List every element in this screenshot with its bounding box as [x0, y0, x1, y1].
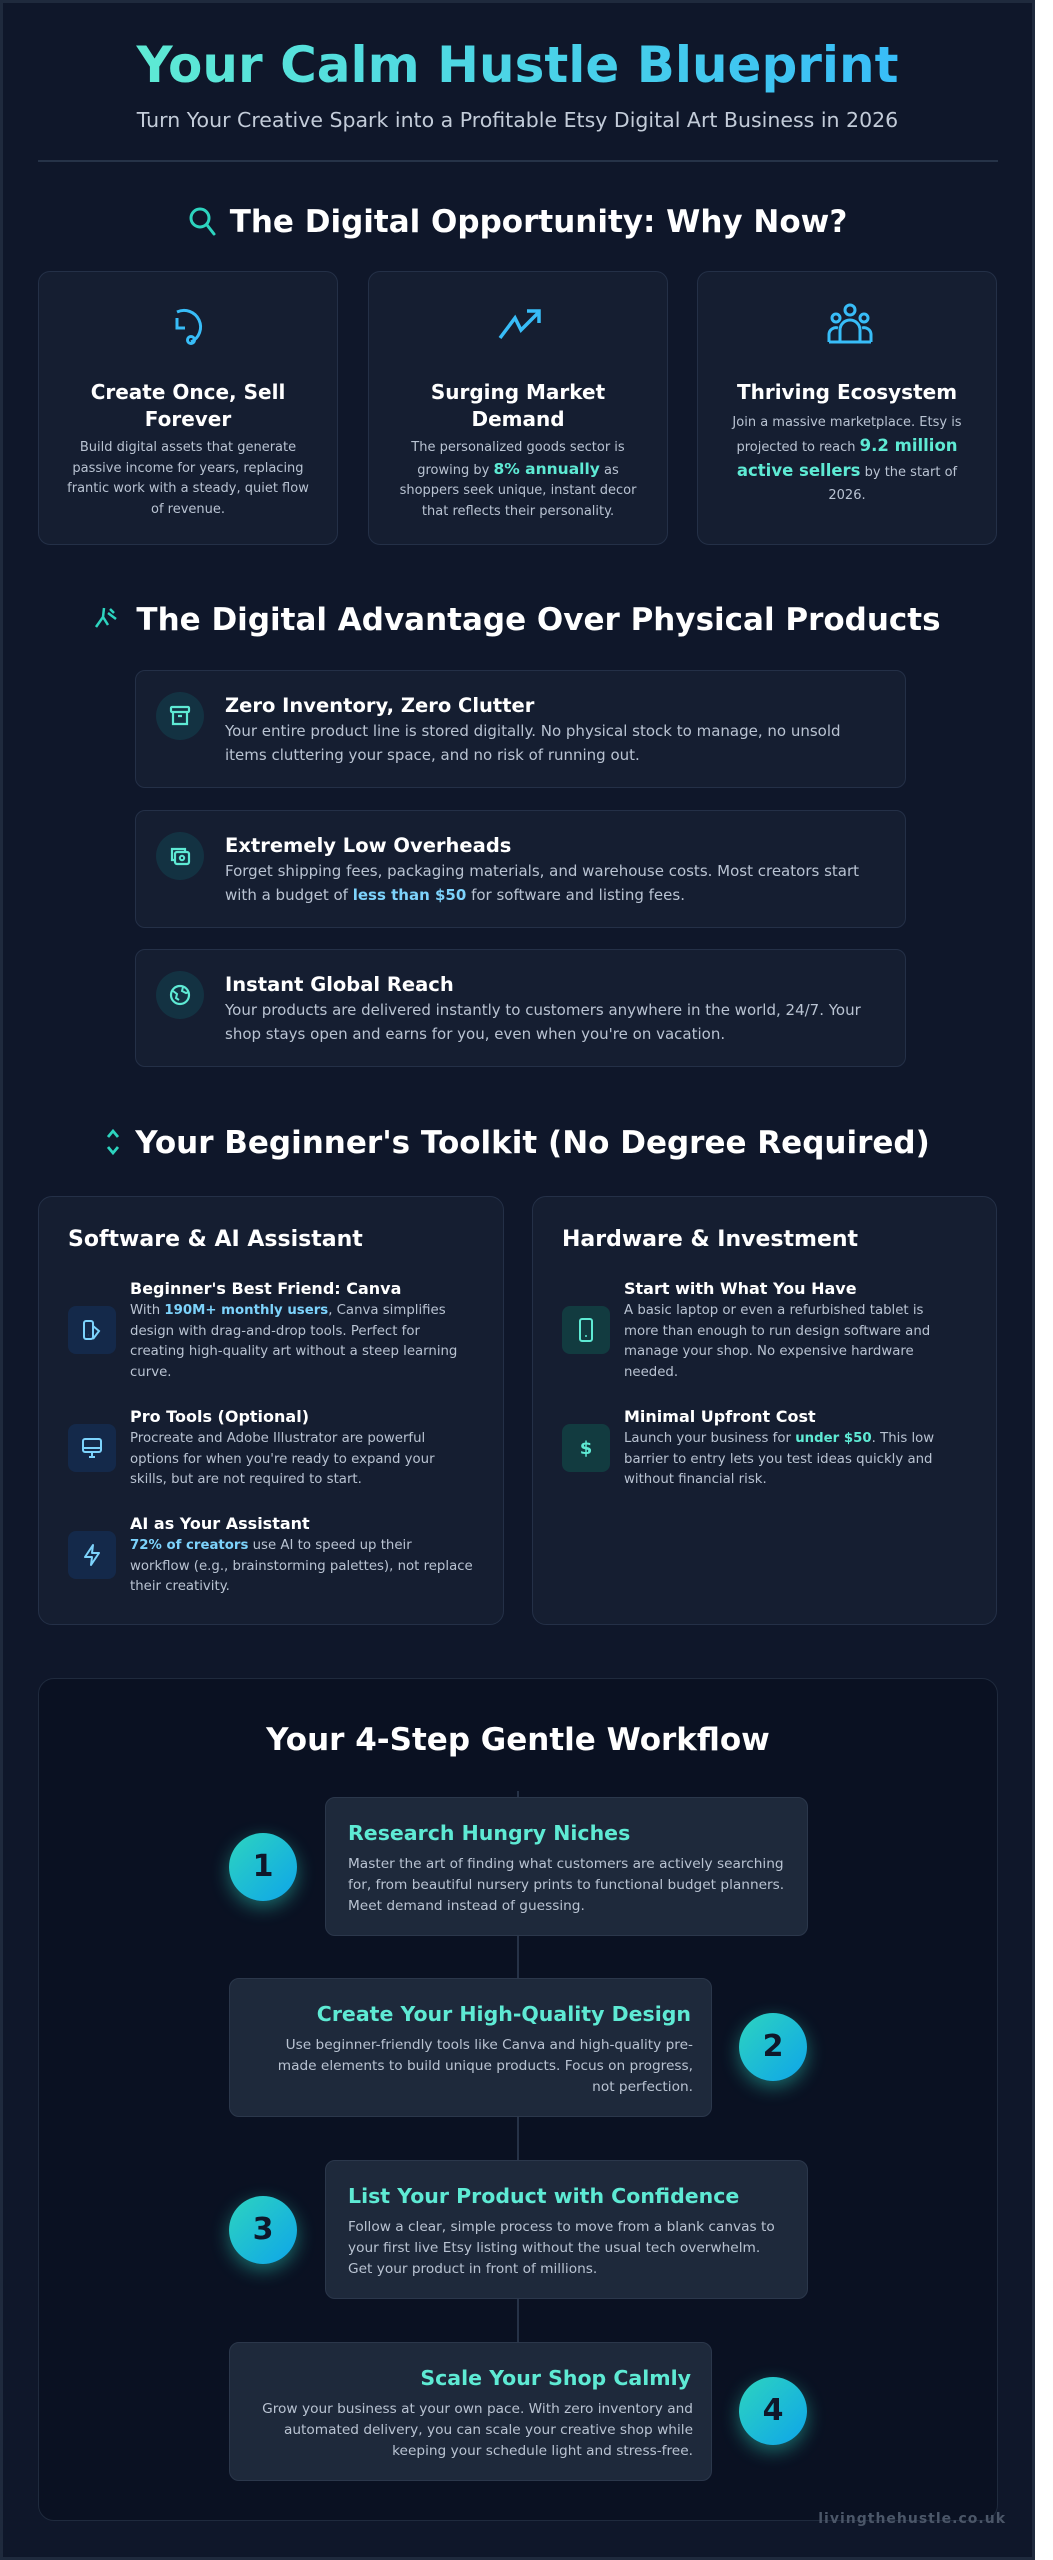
panel: hardware: Hardware & Investment [562, 1227, 858, 1252]
card title [431, 380, 605, 431]
step 2: Use beginner-friendly tools like Canva and high-quality pre-made elements to build unique products. Focus on progress, not perfection. [278, 2037, 693, 2095]
icon: lightning [68, 1531, 116, 1579]
badge 1: 1 [253, 1849, 273, 1884]
badge 3 [229, 2196, 297, 2264]
badge 2 [739, 2013, 807, 2081]
panel: software: Pro Tools (Optional) [130, 1407, 309, 1426]
row: zero inventory: Your entire product line is stored digitally. No physical stock to manage, no unsold items cluttering your space, and no risk of running out. [225, 722, 841, 764]
row: zero inventory: Zero Inventory, Zero Clutter [225, 694, 534, 717]
icon: tablet [562, 1306, 610, 1354]
row: low overheads: Forget shipping fees, packaging materials, and warehouse costs. Most creators start with a budget of less than $50 for software and listing fees. [225, 862, 859, 904]
panel: software: Beginner's Best Friend: Canva [130, 1279, 401, 1298]
card body: Build digital assets that generate passive income for years, replacing frantic work with a steady, quiet flow of revenue. [67, 440, 309, 517]
icon: dollar: $ [580, 1438, 592, 1458]
step 1: Research Hungry Niches [348, 1821, 630, 1845]
card title: Create Once, Sell [91, 380, 285, 404]
workflow heading: Your 4-Step Gentle Workflow [266, 1722, 770, 1758]
step 3: List Your Product with Confidence [348, 2184, 739, 2208]
icon: archive [156, 692, 204, 740]
heading: digital advantage: The Digital Advantage Over Physical Products [136, 602, 941, 638]
title: Your Calm Hustle Blueprint [136, 36, 899, 94]
icon: trend [498, 309, 541, 339]
step 3 [325, 2160, 808, 2299]
panel: hardware: A basic laptop or even a refurbished tablet is more than enough to run design software and manage your shop. No expensive hardware needed. [624, 1303, 930, 1380]
badge 1 [229, 1833, 297, 1901]
panel: software [38, 1196, 504, 1625]
step 3: Follow a clear, simple process to move from a blank canvas to your first live Etsy listing without the usual tech overwhelm. Get your product in front of millions. [348, 2219, 775, 2277]
step 2 [229, 1978, 712, 2117]
step 4 [229, 2342, 712, 2481]
icon: dollar [562, 1424, 610, 1472]
row: low overheads: Extremely Low Overheads [225, 834, 511, 857]
icon: monitor [68, 1424, 116, 1472]
card title [91, 380, 285, 431]
subtitle: Turn Your Creative Spark into a Profitable Etsy Digital Art Business in 2026 [137, 108, 898, 132]
row: global reach: Your products are delivered instantly to customers anywhere in the world, 24/7. Your shop stays open and earns for you, even when you're on vacation. [225, 1001, 861, 1043]
panel: software: With 190M+ monthly users, Canva simplifies design with drag-and-drop tools. Perfect for creating high-quality art without a steep learning curve. [130, 1303, 457, 1380]
card body: The personalized goods sector is growing by 8% annually as shoppers seek unique, instant decor that reflects their personality. [400, 440, 636, 519]
step 2: Create Your High-Quality Design [317, 2002, 691, 2026]
footer: livingthehustle.co.uk [818, 2511, 1006, 2527]
card: market demand [368, 271, 668, 545]
card title: Demand [471, 407, 565, 431]
card: create once [38, 271, 338, 545]
badge 3: 3 [253, 2212, 273, 2247]
badge 4: 4 [763, 2393, 783, 2428]
icon: people [828, 304, 872, 344]
row: zero inventory [135, 670, 906, 788]
row: low overheads [135, 810, 906, 928]
card title: Thriving Ecosystem [737, 380, 957, 404]
step 4: Grow your business at your own pace. With zero inventory and automated delivery, you can scale your creative shop while keeping your schedule light and stress-free. [262, 2401, 693, 2459]
card body: Join a massive marketplace. Etsy is projected to reach 9.2 million active sellers by the start of 2026. [732, 415, 962, 503]
card title: Forever [145, 407, 231, 431]
heading: toolkit: Your Beginner's Toolkit (No Degree Required) [135, 1125, 930, 1161]
step 4: Scale Your Shop Calmly [420, 2366, 691, 2390]
icon: palette [68, 1306, 116, 1354]
panel: workflow [38, 1678, 998, 2521]
heading: digital opportunity: The Digital Opportunity: Why Now? [230, 204, 847, 240]
step 1: Master the art of finding what customers are actively searching for, from beautiful nursery prints to functional budget planners. Meet demand instead of guessing. [348, 1856, 784, 1914]
panel: hardware: Minimal Upfront Cost [624, 1407, 816, 1426]
icon: money [156, 832, 204, 880]
panel: hardware [532, 1196, 997, 1625]
step 1 [325, 1797, 808, 1936]
icon: globe [156, 971, 204, 1019]
badge 4 [739, 2377, 807, 2445]
panel: software: AI as Your Assistant [130, 1514, 310, 1533]
panel: hardware: Launch your business for under $50. This low barrier to entry lets you test ideas quickly and without financial risk. [624, 1431, 934, 1487]
panel: software: 72% of creators use AI to speed up their workflow (e.g., brainstorming palettes), not replace their creativity. [130, 1538, 473, 1594]
panel: hardware: Start with What You Have [624, 1279, 857, 1298]
row: global reach: Instant Global Reach [225, 973, 454, 996]
icon: cycle [176, 308, 202, 345]
card title: Surging Market [431, 380, 605, 404]
panel: software: Procreate and Adobe Illustrator are powerful options for when you're ready to expand your skills, but are not required to start. [130, 1431, 435, 1487]
row: global reach [135, 949, 906, 1067]
panel: software: Software & AI Assistant [68, 1227, 363, 1252]
card: ecosystem [697, 271, 997, 545]
badge 2: 2 [763, 2029, 783, 2064]
